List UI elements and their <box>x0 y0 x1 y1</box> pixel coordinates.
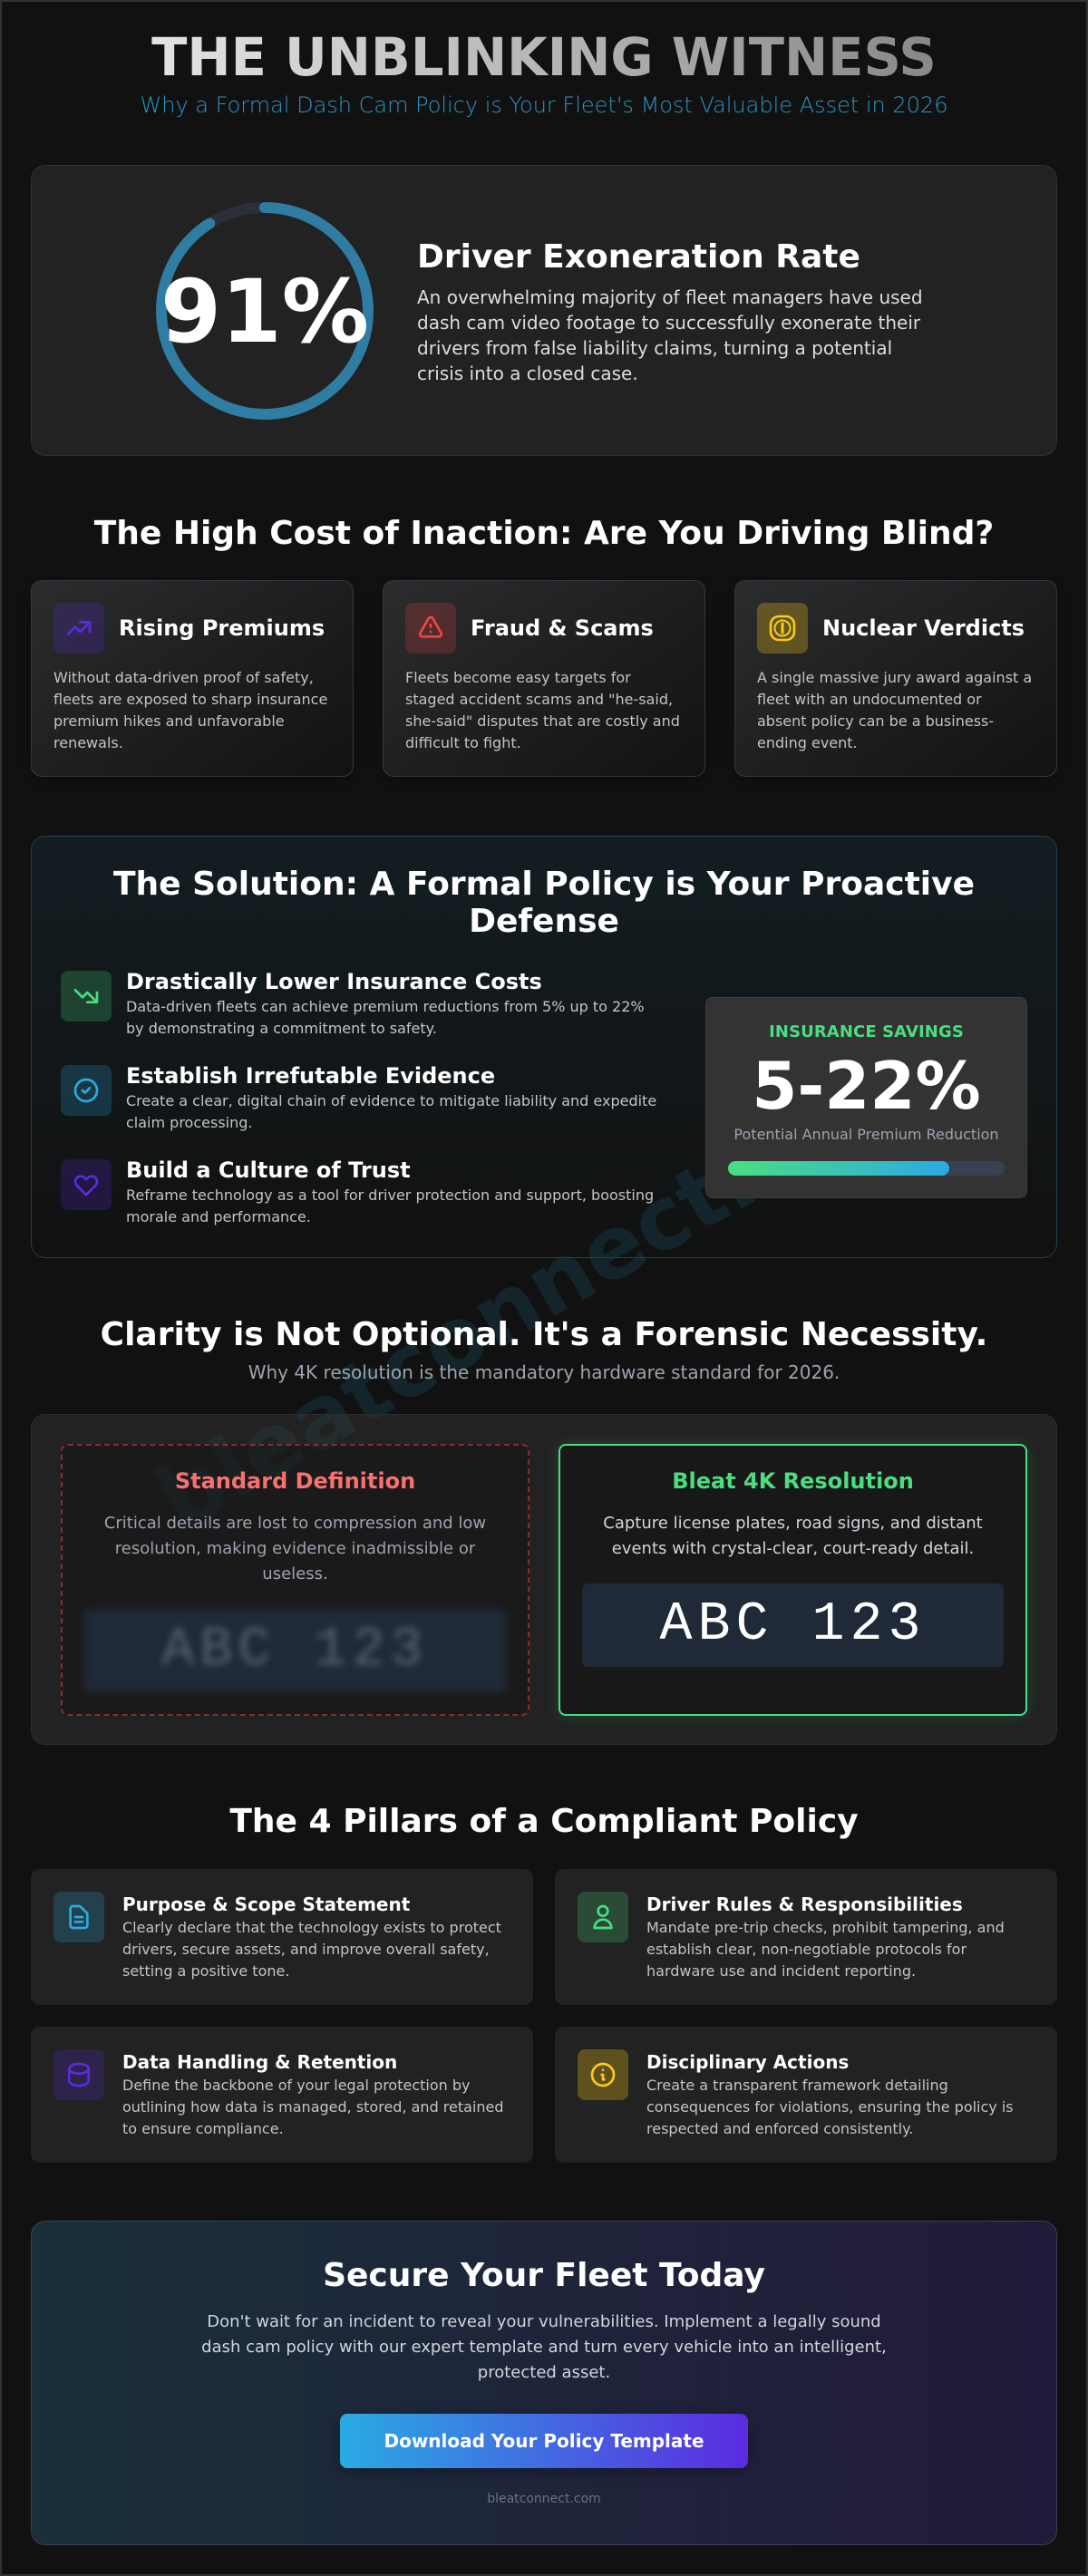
text: fraud and scams: difficult to fight. <box>405 734 521 751</box>
text: data handling <box>122 2077 504 2137</box>
text: purpose and scope: Clearly declare that the technology exists to protect <box>122 1919 501 1936</box>
text: culture of trust: Reframe technology as a tool for driver protection and support, boosting <box>126 1186 654 1204</box>
text: bleat 4k resolution <box>603 1514 983 1558</box>
heading: standard definition: Standard Definition <box>175 1468 415 1494</box>
heading: lower insurance costs: Drastically Lower Insurance Costs <box>126 969 542 994</box>
icon: info circle <box>578 2049 628 2100</box>
text: purpose and scope: drivers, secure assets, and improve overall safety, <box>122 1941 490 1958</box>
panel: nuclear verdicts <box>734 580 1057 777</box>
text: bleat 4k resolution: events with crystal-clear, court-ready detail. <box>612 1539 974 1558</box>
stat: 5-22%: 5-22% <box>752 1048 981 1124</box>
stat: 91%: 91% <box>160 261 369 363</box>
button: download policy template: Download Your Policy Template <box>384 2430 704 2452</box>
subtitle: Why a Formal Dash Cam Policy is Your Fleet's Most Valuable Asset in 2026 <box>141 92 947 118</box>
text: call to action: protected asset. <box>478 2363 610 2382</box>
icon: heart <box>61 1159 112 1210</box>
text: disciplinary actions: Create a transparent framework detailing <box>646 2077 948 2094</box>
button: download policy template <box>340 2414 748 2468</box>
icon: warning triangle <box>405 603 456 654</box>
text: driver rules: Mandate pre-trip checks, prohibit tampering, and <box>646 1919 1005 1936</box>
heading: culture of trust: Build a Culture of Trust <box>126 1157 411 1183</box>
text: exoneration description: dash cam video footage to successfully exonerate their <box>417 312 920 334</box>
text: driver rules <box>646 1919 1005 1980</box>
icon: database <box>53 2049 104 2100</box>
text: exoneration description: crisis into a closed case. <box>417 363 638 384</box>
heading: data handling: Data Handling & Retention <box>122 2051 397 2073</box>
text: nuclear verdicts: absent policy can be a business- <box>757 712 994 730</box>
panel: driver rules <box>555 1869 1057 2005</box>
icon: user <box>578 1892 628 1942</box>
license plate: blurred <box>84 1609 506 1692</box>
text: exoneration description: drivers from false liability claims, turning a potential <box>417 337 892 359</box>
text: bleat 4k resolution: Capture license plates, road signs, and distant <box>603 1514 983 1533</box>
text: lower insurance costs: by demonstrating a commitment to safety. <box>126 1020 437 1037</box>
panel: standard definition <box>61 1444 529 1716</box>
watermark: bleatconnect.com <box>140 1025 948 1551</box>
text: clarity subheading: Why 4K resolution is the mandatory hardware standard for 2026. <box>248 1361 840 1383</box>
heading: 4 pillars: The 4 Pillars of a Compliant Policy <box>229 1803 859 1840</box>
text: rising premiums: fleets are exposed to sharp insurance <box>53 691 327 708</box>
text: disciplinary actions: consequences for violations, ensuring the policy is <box>646 2098 1014 2116</box>
text: irrefutable evidence: claim processing. <box>126 1114 252 1131</box>
text: purpose and scope: setting a positive tone. <box>122 1962 289 1980</box>
text: nuclear verdicts: ending event. <box>757 734 858 751</box>
panel: fraud and scams <box>383 580 705 777</box>
heading: nuclear verdicts: Nuclear Verdicts <box>822 615 1025 641</box>
text: standard definition: useless. <box>262 1564 328 1583</box>
icon: check circle <box>61 1065 112 1116</box>
panel: call to action <box>31 2221 1057 2545</box>
text: driver rules: hardware use and incident reporting. <box>646 1962 916 1980</box>
icon: nuclear seal <box>757 603 808 654</box>
icon: trending up <box>53 603 104 654</box>
caption: potential annual premium reduction: Potential Annual Premium Reduction <box>733 1126 999 1143</box>
panel: the solution <box>31 836 1057 1258</box>
text: exoneration description: An overwhelming majority of fleet managers have used <box>417 286 923 308</box>
panel: exoneration rate <box>31 165 1057 456</box>
heading: bleat 4k resolution: Bleat 4K Resolution <box>672 1468 914 1494</box>
heading: fraud and scams: Fraud & Scams <box>471 615 654 641</box>
heading: high cost of inaction: The High Cost of Inaction: Are You Driving Blind? <box>94 515 994 552</box>
chart: 91% progress ring <box>156 202 374 420</box>
license plate: blurred: ABC 123 <box>161 1620 429 1681</box>
panel: purpose and scope <box>31 1869 533 2005</box>
text: driver rules: establish clear, non-negotiable protocols for <box>646 1941 967 1958</box>
text: rising premiums: renewals. <box>53 734 123 751</box>
heading: irrefutable evidence: Establish Irrefutable Evidence <box>126 1063 495 1089</box>
text: data handling: to ensure compliance. <box>122 2120 284 2137</box>
text: rising premiums: premium hikes and unfavorable <box>53 712 285 730</box>
icon: trending down <box>61 971 112 1022</box>
label: insurance savings: INSURANCE SAVINGS <box>769 1022 964 1041</box>
text: culture of trust <box>126 1186 654 1225</box>
text: call to action <box>201 2312 887 2382</box>
heading: disciplinary actions: Disciplinary Actions <box>646 2051 849 2073</box>
text: fraud and scams: she-said" disputes that are costly and <box>405 712 680 730</box>
text: disciplinary actions <box>646 2077 1014 2137</box>
text: rising premiums <box>53 669 327 751</box>
license plate: sharp: ABC 123 <box>659 1594 927 1656</box>
text: nuclear verdicts: fleet with an undocumented or <box>757 691 982 708</box>
title: THE UNBLINKING WITNESS <box>151 27 937 88</box>
text: fraud and scams: Fleets become easy targets for <box>405 669 631 686</box>
heading: the solution <box>113 866 975 940</box>
text: lower insurance costs: Data-driven fleets can achieve premium reductions from 5% up to 22% <box>126 998 645 1015</box>
text: data handling: outlining how data is managed, stored, and retained <box>122 2098 504 2116</box>
heading: rising premiums: Rising Premiums <box>119 615 325 641</box>
text: rising premiums: Without data-driven proof of safety, <box>53 669 314 686</box>
benefit: culture of trust <box>61 1157 654 1225</box>
text: disciplinary actions: respected and enforced consistently. <box>646 2120 913 2137</box>
panel: rising premiums <box>31 580 354 777</box>
chart: savings progress bar <box>728 1161 1005 1176</box>
text: standard definition: resolution, making evidence inadmissible or <box>115 1539 475 1558</box>
text: nuclear verdicts <box>757 669 1032 751</box>
panel: data handling <box>31 2027 533 2163</box>
text: call to action: dash cam policy with our expert template and turn every vehicle into an intelligent, <box>201 2338 887 2357</box>
benefit: irrefutable evidence <box>61 1063 656 1131</box>
heading: the solution: The Solution: A Formal Policy is Your Proactive <box>113 866 975 903</box>
icon: document <box>53 1892 104 1942</box>
callout: insurance savings <box>705 997 1027 1198</box>
text: nuclear verdicts: A single massive jury award against a <box>757 669 1032 686</box>
text: call to action: Don't wait for an incident to reveal your vulnerabilities. Implement a legally sound <box>207 2312 881 2331</box>
license plate: sharp <box>582 1583 1004 1667</box>
text: fraud and scams <box>405 669 680 751</box>
benefit: lower insurance costs <box>61 969 645 1037</box>
text: fraud and scams: staged accident scams and "he-said, <box>405 691 673 708</box>
text: purpose and scope <box>122 1919 501 1980</box>
heading: clarity is not optional: Clarity is Not Optional. It's a Forensic Necessity. <box>101 1316 987 1353</box>
heading: driver rules: Driver Rules & Responsibilities <box>646 1893 963 1915</box>
text: culture of trust: morale and performance. <box>126 1208 311 1225</box>
text: lower insurance costs <box>126 998 645 1037</box>
panel: bleat 4k resolution <box>559 1444 1027 1716</box>
text: standard definition <box>104 1514 486 1583</box>
heading: purpose and scope: Purpose & Scope Statement <box>122 1893 410 1915</box>
heading: the solution: Defense <box>469 903 619 940</box>
panel: resolution comparison <box>31 1414 1057 1745</box>
text: irrefutable evidence: Create a clear, digital chain of evidence to mitigate liability and expedite <box>126 1092 656 1109</box>
panel: disciplinary actions <box>555 2027 1057 2163</box>
text: irrefutable evidence <box>126 1092 656 1131</box>
text: exoneration description <box>417 286 923 384</box>
text: standard definition: Critical details are lost to compression and low <box>104 1514 486 1533</box>
heading: driver exoneration rate: Driver Exoneration Rate <box>417 238 860 276</box>
text: data handling: Define the backbone of your legal protection by <box>122 2077 470 2094</box>
heading: secure your fleet today: Secure Your Fleet Today <box>323 2257 765 2294</box>
footer: website: bleatconnect.com <box>487 2492 601 2506</box>
